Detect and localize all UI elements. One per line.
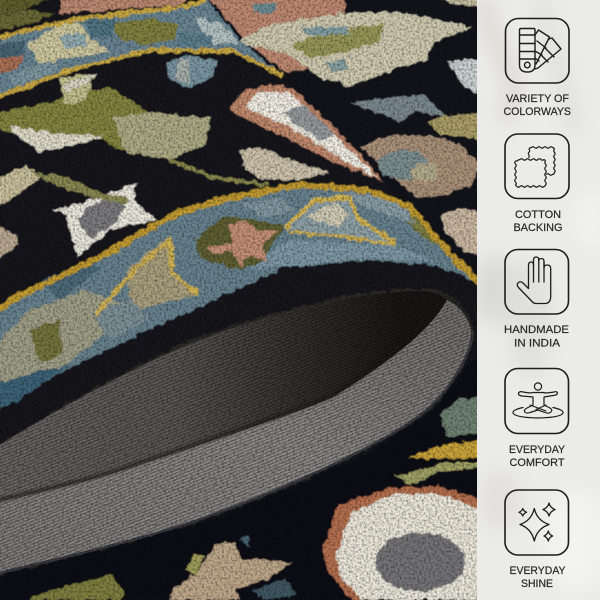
cream motif xyxy=(240,147,330,180)
icon: fabric squares xyxy=(505,134,569,198)
feature: handmade in india xyxy=(504,250,569,350)
label: handmade in india xyxy=(504,324,569,350)
feature: variety of colorways xyxy=(504,18,571,118)
icon: hand xyxy=(505,250,568,314)
icon: colour swatch fan xyxy=(506,18,569,83)
label: everyday shine: EVERYDAY xyxy=(510,565,566,577)
label: everyday comfort xyxy=(509,444,566,469)
knot texture xyxy=(0,0,477,600)
label: everyday shine: SHINE xyxy=(521,578,553,590)
white fold motif xyxy=(228,84,385,182)
faint backdrop texture xyxy=(477,0,572,523)
rolled rug front body xyxy=(0,0,477,410)
blue motif xyxy=(167,55,217,88)
lower border band xyxy=(0,185,480,412)
left cream motifs xyxy=(0,166,42,205)
label: variety of colorways xyxy=(504,93,571,118)
foreground floor rug xyxy=(0,350,480,600)
label: everyday comfort: EVERYDAY xyxy=(509,444,566,456)
rug photo xyxy=(0,0,480,600)
stitched olive trail xyxy=(170,160,268,185)
flower medallion xyxy=(323,486,480,600)
feature: cotton backing xyxy=(505,134,569,234)
label: everyday shine xyxy=(510,565,566,590)
icon: meditating figure xyxy=(505,368,568,434)
sidebar panel xyxy=(473,0,600,600)
upper border band xyxy=(0,0,282,98)
label: handmade in india: IN INDIA xyxy=(514,338,561,350)
label: cotton backing xyxy=(514,209,562,234)
label: everyday comfort: COMFORT xyxy=(510,457,565,469)
olive and khaki motif xyxy=(0,88,210,160)
gold outlines xyxy=(0,0,282,98)
olive motif xyxy=(30,575,124,600)
feature: everyday shine xyxy=(505,490,568,590)
label: cotton backing: COTTON xyxy=(515,209,561,221)
icon: sparkles xyxy=(505,490,568,555)
label: variety of colorways: VARIETY OF xyxy=(506,93,569,105)
tan motif xyxy=(170,542,292,600)
label: variety of colorways: COLORWAYS xyxy=(504,106,571,118)
white and grey diamond motif xyxy=(54,182,157,257)
label: handmade in india: HANDMADE xyxy=(504,324,569,336)
feature: everyday comfort xyxy=(505,368,568,469)
rug backing xyxy=(0,288,473,576)
floor rug behind the roll xyxy=(205,0,480,255)
label: cotton backing: BACKING xyxy=(514,222,562,234)
